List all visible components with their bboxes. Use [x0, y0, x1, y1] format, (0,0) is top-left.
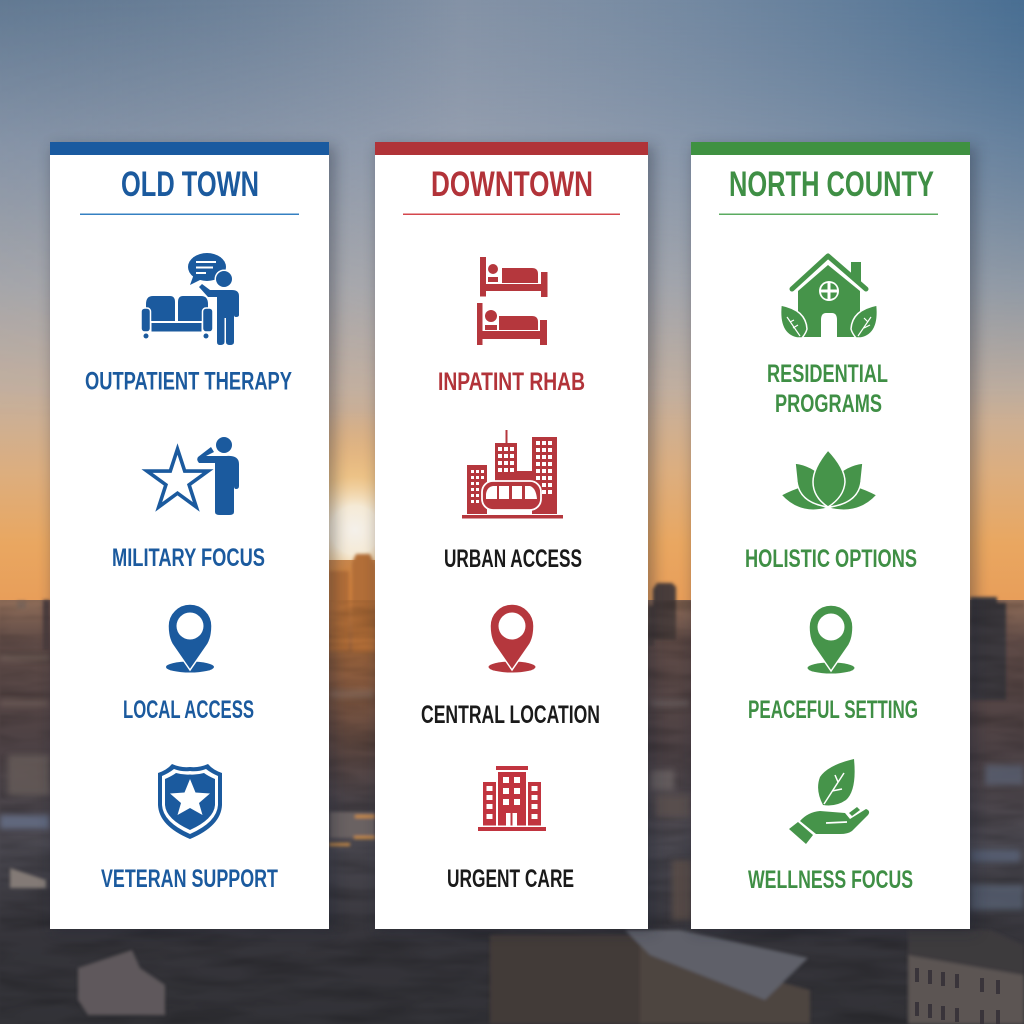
icon: hand holding leaf — [789, 759, 869, 844]
label: Veteran Support: VETERAN SUPPORT — [101, 865, 278, 893]
label: Residential Programs: RESIDENTIAL — [767, 360, 888, 388]
panel: North County — [691, 142, 970, 929]
label: Urban Access: URBAN ACCESS — [444, 545, 582, 573]
heading: North County: NORTH COUNTY — [729, 165, 934, 204]
icon: therapy couch and person — [141, 253, 239, 345]
rooftops foreground — [10, 812, 1024, 1024]
building windows — [915, 968, 1000, 1024]
icon: star and saluting person — [147, 437, 239, 515]
panel shadows — [52, 146, 976, 932]
icon: city buildings and tram — [462, 430, 563, 518]
icon: hospital building — [478, 766, 546, 831]
label: Local Access: LOCAL ACCESS — [123, 696, 254, 724]
heading: Downtown: DOWNTOWN — [431, 165, 593, 204]
label: Peaceful Setting: PEACEFUL SETTING — [748, 696, 918, 724]
label: Wellness Focus: WELLNESS FOCUS — [748, 866, 913, 894]
label: Residential Programs: PROGRAMS — [775, 390, 882, 418]
label: Residential Programs — [767, 360, 888, 418]
label: Military Focus: MILITARY FOCUS — [112, 544, 265, 572]
icon: location pin — [808, 605, 854, 674]
light city patches — [0, 655, 1024, 920]
icon: two hospital beds — [477, 257, 548, 345]
label: Urgent Care: URGENT CARE — [447, 865, 574, 893]
icon: shield with star — [158, 764, 222, 839]
icon: lotus — [781, 450, 877, 510]
panel: Downtown — [375, 142, 648, 929]
heading: Old Town: OLD TOWN — [121, 165, 259, 204]
label: Outpatient Therapy: OUTPATIENT THERAPY — [85, 368, 292, 396]
label: Inpatint Rhab: INPATINT RHAB — [438, 368, 585, 396]
icon: location pin — [488, 604, 536, 672]
label: Holistic Options: HOLISTIC OPTIONS — [745, 545, 917, 573]
icon: location pin — [166, 604, 214, 672]
panel: Old Town — [50, 142, 329, 929]
label: Central Location: CENTRAL LOCATION — [421, 701, 600, 729]
icon: house with leaves — [781, 256, 877, 338]
skyline towers — [17, 554, 1006, 700]
